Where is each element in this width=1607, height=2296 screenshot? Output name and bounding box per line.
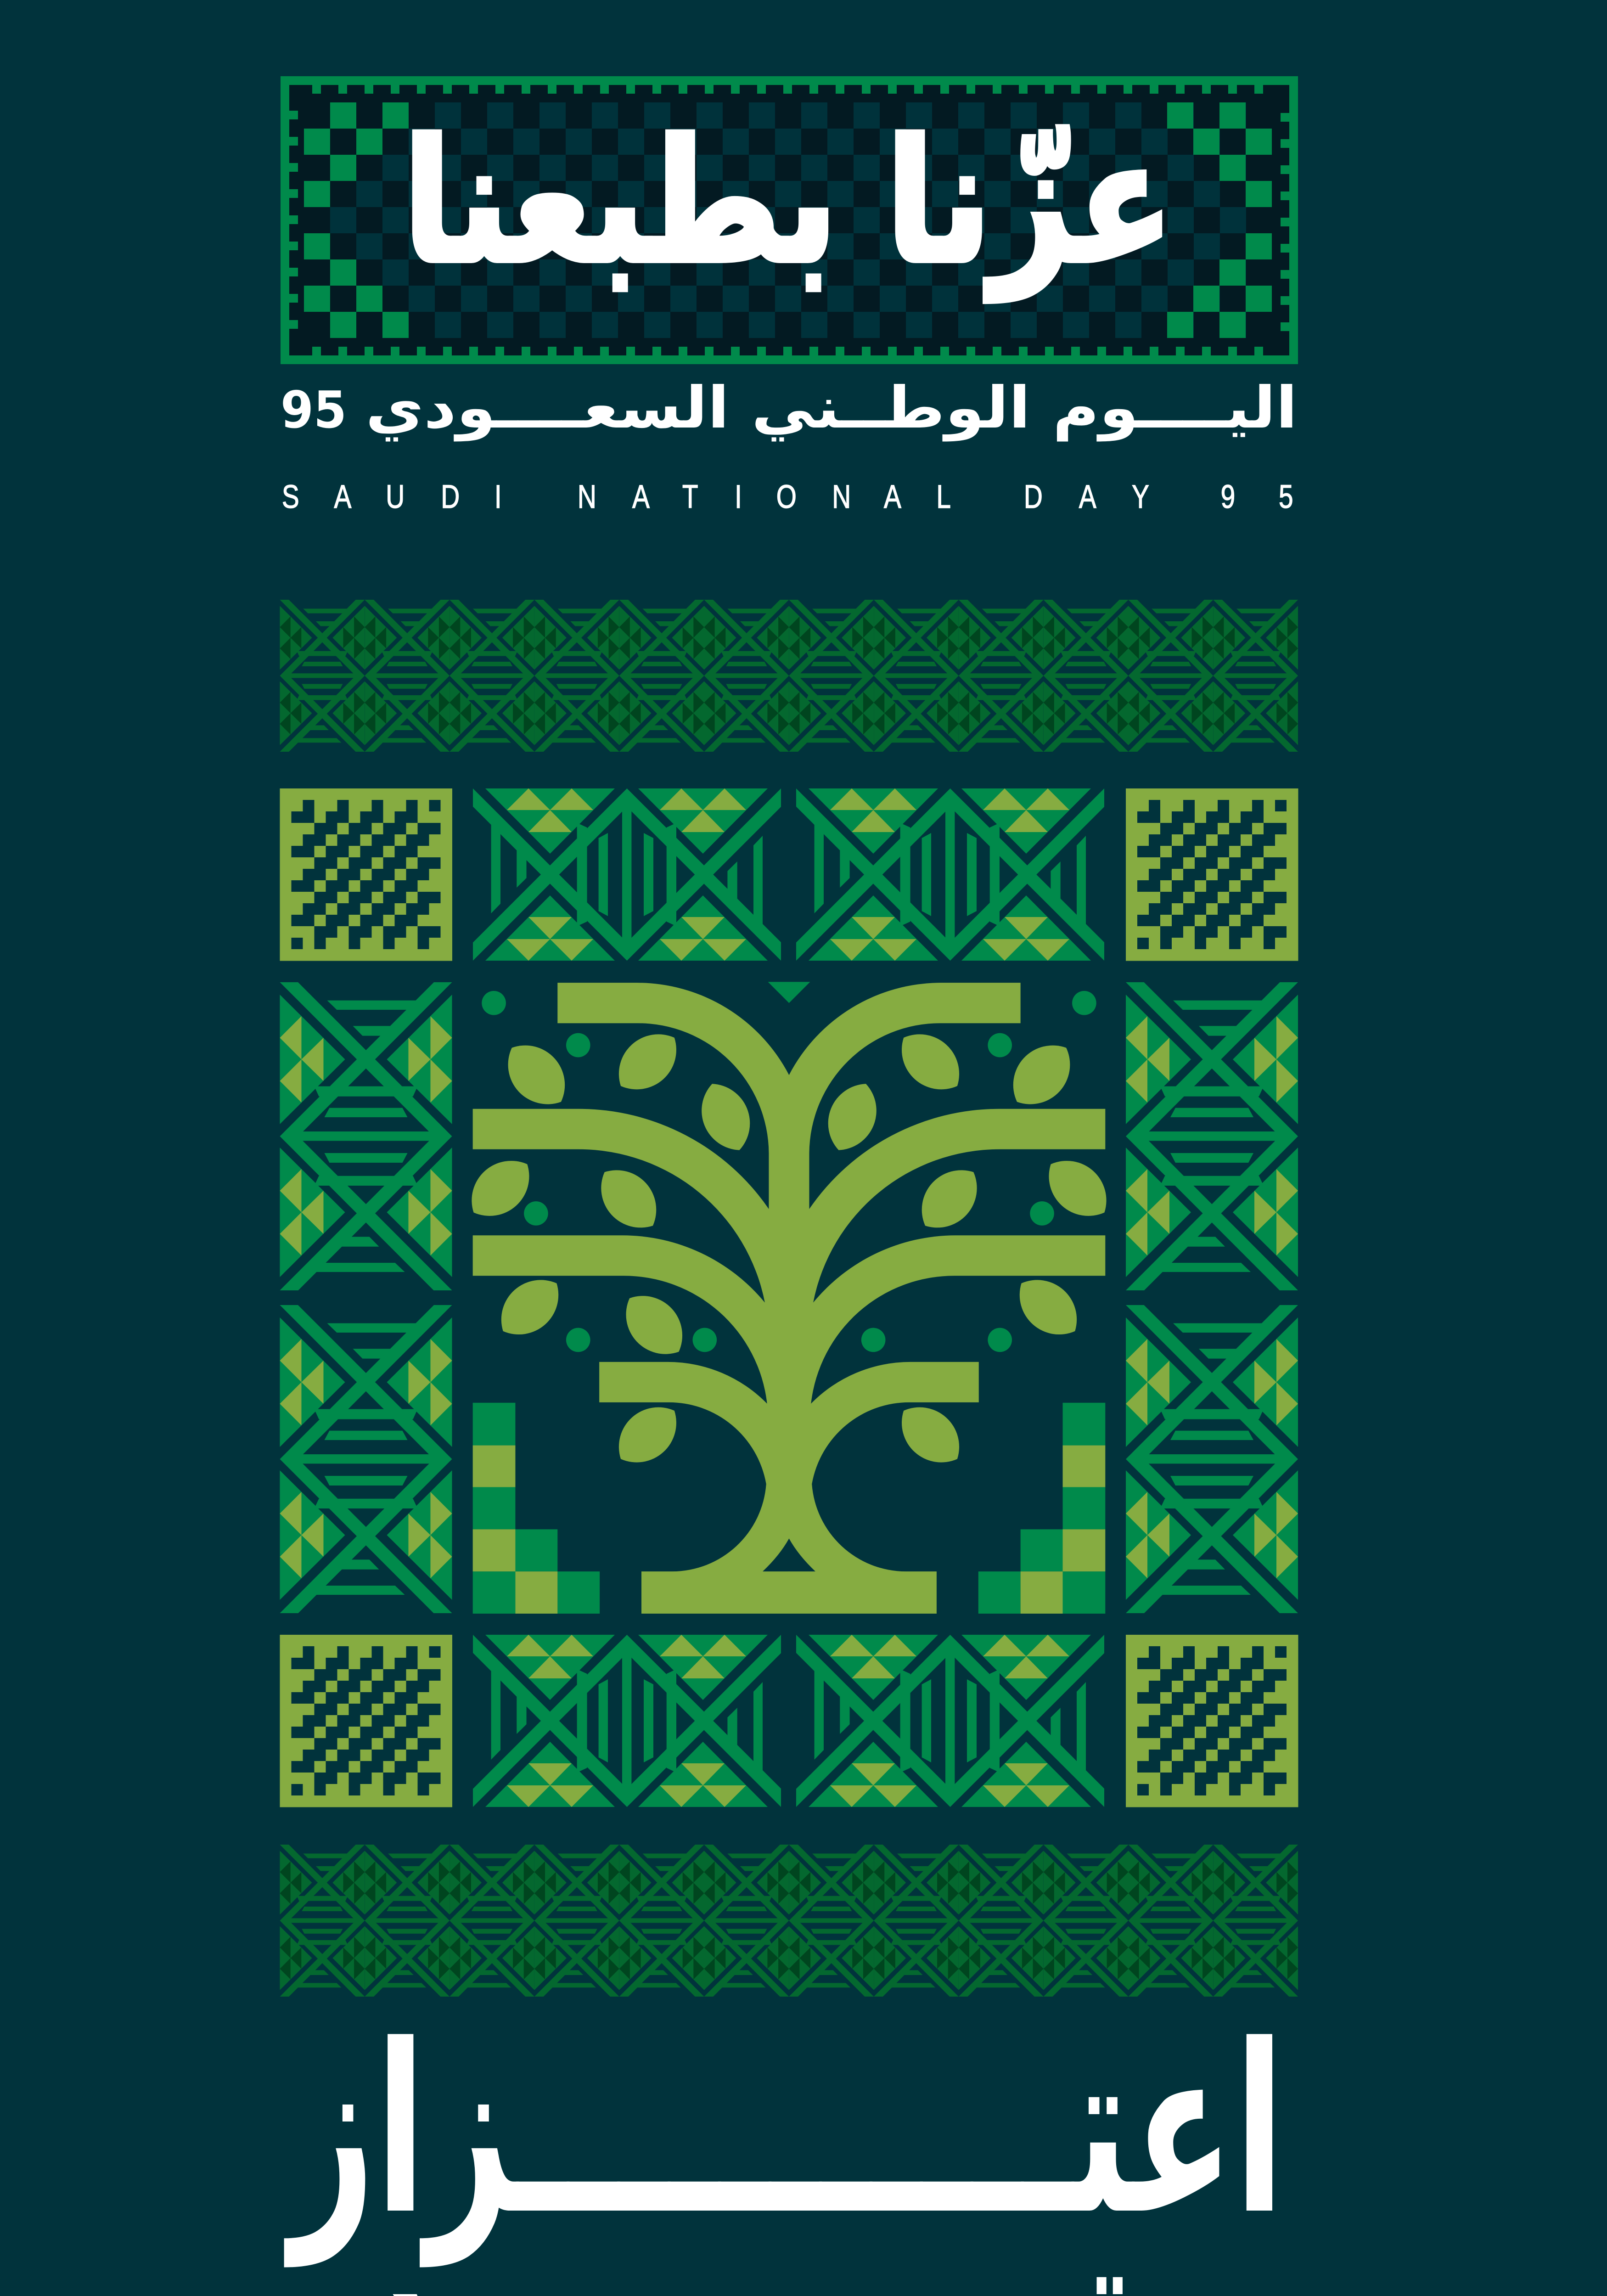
panel: left vertical pattern lower	[280, 1305, 452, 1613]
heading: Arabic national day line: اليــــوم الوطــني السعــــودي	[365, 375, 1298, 442]
panel: title frame with woven checker border	[281, 76, 1298, 364]
pattern band: bottom	[280, 1845, 1298, 1997]
heading: English national day line: SAUDINATIONALDAY95	[282, 478, 1293, 515]
title: Arabic slogan: عزّنا بطبعنا	[403, 105, 1174, 302]
panel: left vertical pattern upper	[280, 982, 452, 1290]
icon: tree with leaves, fruits and stepped corners	[472, 982, 1107, 1614]
heading: number 95: 95	[281, 381, 347, 440]
panel: bottom right woven square	[1126, 1635, 1298, 1807]
panel: bottom left woven square	[280, 1635, 452, 1807]
icon: extra leaf	[626, 1296, 682, 1354]
panel: bottom horizontal triangle pattern right	[796, 1635, 1104, 1807]
panel: bottom horizontal triangle pattern left	[473, 1635, 781, 1807]
icon: small top triangle	[768, 982, 810, 1003]
panel: right vertical pattern lower	[1126, 1305, 1298, 1613]
panel: top right woven square	[1126, 788, 1298, 961]
pattern band: top	[280, 600, 1298, 752]
panel: top horizontal triangle pattern left	[473, 788, 781, 961]
panel: right vertical pattern upper	[1126, 982, 1298, 1290]
panel: top left woven square	[280, 788, 452, 961]
panel: top horizontal triangle pattern right	[796, 788, 1104, 961]
